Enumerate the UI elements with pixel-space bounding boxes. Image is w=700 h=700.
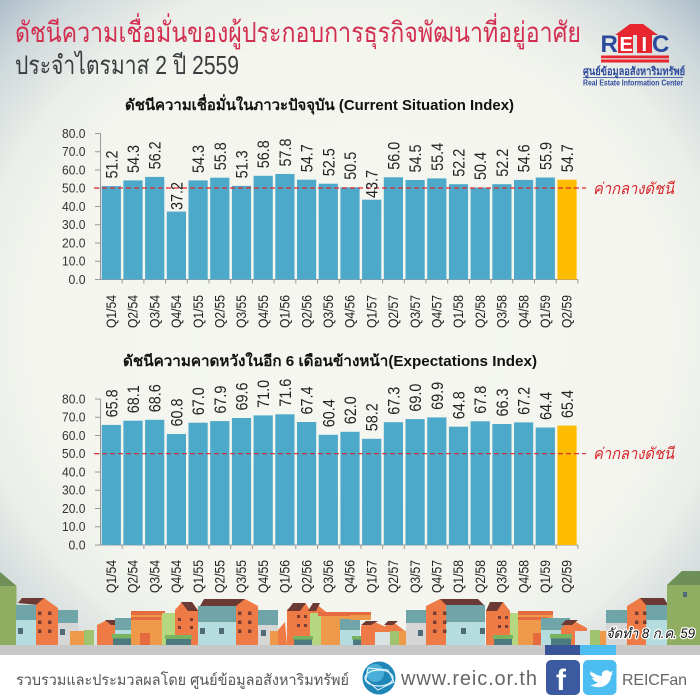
y axis — [95, 134, 578, 284]
x axis labels: Q3/58 — [495, 295, 510, 328]
x axis labels: Q2/57 — [386, 560, 401, 593]
x axis labels: Q2/55 — [212, 295, 228, 328]
y axis labels — [62, 126, 86, 287]
callout: median label chart 1: ค่ากลางดัชนี — [593, 180, 675, 198]
icon: globe — [362, 662, 396, 694]
x axis labels: Q3/56 — [321, 560, 336, 593]
x axis labels: Q1/55 — [191, 560, 206, 593]
median dashed line — [94, 453, 586, 455]
x axis labels: Q3/55 — [234, 560, 249, 593]
y axis labels: 60.0 — [62, 428, 86, 443]
x axis labels: Q3/55 — [234, 295, 249, 328]
value labels: 54.7 — [298, 144, 317, 172]
callout: median label chart 2: ค่ากลางดัชนี — [593, 445, 675, 463]
value labels: 56.0 — [384, 142, 403, 170]
y axis labels: 70.0 — [62, 410, 86, 425]
value labels: 69.9 — [428, 382, 447, 410]
icon: twitter — [583, 660, 616, 695]
value labels: 50.4 — [471, 152, 490, 180]
value labels: 52.5 — [319, 148, 338, 176]
icon: facebook: f — [556, 664, 567, 697]
y axis labels: 40.0 — [62, 464, 86, 480]
x axis labels: Q2/59 — [560, 560, 575, 593]
x axis labels: Q3/58 — [495, 560, 510, 593]
y axis — [95, 399, 578, 549]
x axis labels: Q4/58 — [516, 560, 531, 593]
y axis labels: 80.0 — [62, 126, 86, 141]
x axis labels: Q1/56 — [278, 295, 293, 328]
x axis labels: Q1/56 — [278, 560, 293, 593]
y axis labels: 0.0 — [68, 272, 86, 287]
value labels: 51.3 — [232, 150, 252, 178]
x axis labels: Q1/54 — [104, 560, 119, 593]
x axis labels: Q4/56 — [343, 560, 358, 593]
bars — [102, 414, 577, 545]
value labels: 66.3 — [493, 388, 512, 416]
title: ดัชนีความเชื่อมั่นของผู้ประกอบการธุรกิจพัฒนาที่อยู่อาศัย — [15, 13, 581, 50]
value labels: 43.7 — [363, 170, 382, 198]
y axis labels: 10.0 — [62, 254, 86, 269]
y axis labels: 40.0 — [62, 199, 86, 214]
value labels: 62.0 — [341, 396, 360, 424]
value labels: 57.8 — [276, 138, 295, 166]
value labels: 37.2 — [167, 182, 186, 210]
value labels: 60.4 — [319, 399, 338, 427]
x axis labels — [104, 560, 575, 593]
x axis labels: Q3/57 — [408, 560, 423, 593]
value labels: 55.8 — [211, 142, 230, 170]
icon: REIC logo: I — [642, 34, 647, 56]
value labels: 55.9 — [536, 142, 555, 170]
value labels: 52.2 — [450, 149, 468, 177]
value labels: 56.8 — [254, 140, 273, 168]
x axis labels: Q1/59 — [538, 295, 553, 328]
x axis labels: Q4/57 — [430, 560, 444, 593]
icon: REIC logo: E — [620, 34, 633, 56]
x axis labels: Q1/58 — [451, 560, 466, 593]
y axis labels: 30.0 — [62, 483, 86, 498]
x axis labels: Q1/59 — [538, 560, 553, 593]
value labels: 51.2 — [102, 150, 121, 178]
value labels: 64.8 — [450, 391, 468, 419]
x axis labels: Q2/58 — [473, 560, 488, 593]
y axis labels: 50.0 — [62, 446, 86, 461]
value labels: 67.4 — [298, 386, 317, 414]
value labels: 67.2 — [515, 387, 534, 415]
x axis labels: Q4/58 — [516, 295, 531, 328]
bar chart: expectations index — [62, 379, 586, 593]
x axis labels: Q3/57 — [408, 295, 423, 328]
y axis labels: 20.0 — [62, 501, 86, 516]
y axis labels: 20.0 — [62, 236, 86, 250]
x axis labels: Q1/57 — [364, 295, 379, 328]
x axis labels: Q2/59 — [560, 295, 575, 328]
y axis labels: 30.0 — [62, 217, 86, 232]
y axis labels: 10.0 — [62, 519, 86, 534]
value labels: 67.9 — [211, 386, 230, 414]
x axis labels: Q3/54 — [147, 560, 162, 593]
x axis labels: Q1/57 — [364, 560, 379, 593]
value labels: 67.3 — [384, 387, 403, 415]
x axis labels: Q4/54 — [169, 295, 184, 328]
value labels: 55.4 — [428, 143, 447, 171]
value labels — [102, 138, 577, 210]
value labels: 54.5 — [406, 144, 425, 172]
x axis labels: Q2/56 — [299, 295, 314, 328]
value labels: 65.8 — [102, 389, 121, 417]
x axis labels: Q4/57 — [430, 295, 444, 328]
y axis labels: 0.0 — [68, 538, 86, 552]
icon: REIC logo: C — [652, 31, 669, 58]
value labels: 71.6 — [276, 379, 295, 407]
illustration: row of houses — [0, 571, 700, 645]
value labels — [102, 379, 577, 431]
value labels: 54.7 — [558, 144, 577, 172]
x axis labels: Q3/54 — [147, 295, 162, 328]
value labels: 69.6 — [232, 382, 252, 410]
y axis labels: 80.0 — [62, 392, 86, 406]
value labels: 56.2 — [146, 141, 165, 169]
value labels: 58.2 — [363, 403, 382, 431]
y axis labels: 70.0 — [62, 144, 86, 159]
value labels: 67.0 — [189, 387, 208, 415]
x axis labels: Q4/54 — [169, 560, 184, 593]
value labels: 69.0 — [406, 384, 425, 412]
heading: current situation chart: ดัชนีความเชื่อมั่นในภาวะปัจจุบัน (Current Situation Index) — [125, 94, 514, 115]
value labels: 50.5 — [341, 152, 360, 180]
social handle: REICFan — [622, 672, 687, 689]
value labels: 68.6 — [146, 384, 165, 412]
ground strip — [0, 645, 700, 655]
bar chart: current situation index — [62, 126, 586, 328]
footer credit text: รวบรวมและประมวลผลโดย ศูนย์ข้อมูลอสังหาริมทรัพย์ — [16, 671, 349, 689]
x axis labels: Q1/58 — [451, 295, 466, 328]
x axis labels: Q2/55 — [212, 560, 228, 593]
y axis labels: 60.0 — [62, 162, 86, 178]
value labels: 67.8 — [471, 386, 490, 414]
value labels: 71.0 — [254, 380, 273, 408]
x axis labels: Q2/56 — [299, 560, 314, 593]
x axis labels: Q2/54 — [126, 295, 141, 328]
x axis labels: Q3/56 — [321, 295, 336, 328]
subtitle: ประจำไตรมาส 2 ปี 2559 — [15, 50, 239, 80]
icon: REIC logo — [583, 24, 685, 88]
x axis labels: Q4/55 — [256, 560, 271, 593]
x axis labels: Q1/54 — [104, 295, 119, 328]
value labels: 54.3 — [124, 145, 143, 173]
heading: expectations chart: ดัชนีความคาดหวังในอีก 6 เดือนข้างหน้า(Expectations Index) — [123, 352, 537, 370]
y axis labels — [62, 392, 86, 552]
median dashed line — [94, 187, 586, 189]
x axis labels: Q4/55 — [256, 295, 271, 328]
icon: REIC logo: Real Estate Information Center — [583, 78, 683, 88]
value labels: 52.2 — [493, 149, 512, 177]
x axis labels — [104, 295, 575, 328]
value labels: 54.3 — [189, 145, 208, 173]
icon: facebook — [546, 660, 580, 697]
value labels: 64.4 — [536, 392, 555, 420]
website url: www.reic.or.th — [400, 668, 537, 690]
value labels: 65.4 — [558, 390, 577, 418]
value labels: 68.1 — [124, 385, 143, 413]
value labels: 54.6 — [515, 144, 534, 172]
icon: REIC logo: R — [600, 31, 618, 58]
date note: จัดทำ 8 ก.ค. 59 — [606, 626, 695, 641]
bars — [102, 174, 577, 280]
x axis labels: Q1/55 — [191, 295, 206, 328]
value labels: 60.8 — [167, 398, 186, 426]
x axis labels: Q2/54 — [126, 560, 141, 593]
y axis labels: 50.0 — [62, 181, 86, 196]
x axis labels: Q2/57 — [386, 295, 401, 328]
x axis labels: Q2/58 — [473, 295, 488, 328]
x axis labels: Q4/56 — [343, 295, 358, 328]
